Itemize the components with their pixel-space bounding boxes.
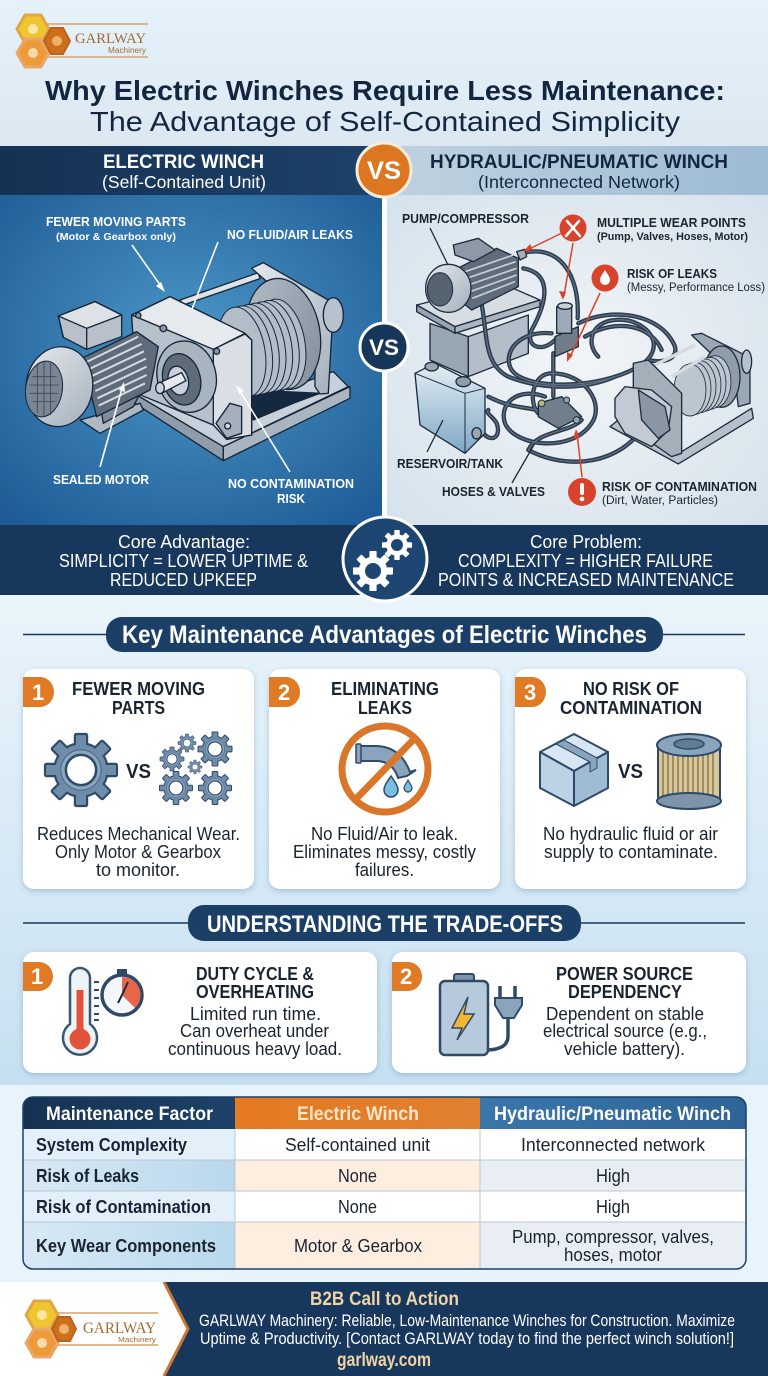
icon: one gear vs many gears: VS bbox=[126, 761, 151, 783]
badge 2: 2 bbox=[400, 964, 412, 989]
comparison header: hydraulic/pneumatic winch bbox=[384, 146, 768, 195]
panel: hydraulic/pneumatic winch bbox=[387, 195, 768, 525]
label: fewer moving parts: FEWER MOVING PARTS bbox=[46, 214, 186, 229]
card text: Dependent on stable bbox=[546, 1004, 704, 1024]
card title: LEAKS bbox=[358, 697, 412, 718]
card text: electrical source (e.g., bbox=[543, 1021, 707, 1041]
label: risk of contamination bbox=[602, 479, 757, 507]
row: key wear components: Key Wear Components bbox=[36, 1236, 216, 1256]
icon: one gear vs many gears bbox=[45, 732, 232, 806]
annotation arrows bbox=[100, 242, 290, 472]
logo: GARLWAY Machinery: Machinery bbox=[108, 46, 146, 55]
card text: Limited run time. bbox=[190, 1004, 321, 1024]
label: risk of leaks bbox=[627, 266, 765, 294]
badge 3 bbox=[515, 677, 546, 707]
icon: plug bbox=[489, 986, 522, 1050]
row: risk of leaks bbox=[36, 1166, 630, 1186]
panel: electric winch bbox=[0, 195, 387, 525]
card text bbox=[543, 824, 718, 862]
heading: understanding the trade-offs: UNDERSTANDING THE TRADE-OFFS bbox=[207, 911, 563, 938]
logo: GARLWAY Machinery: GARLWAY bbox=[75, 31, 146, 47]
core problem: Core Problem: bbox=[530, 532, 642, 552]
card text bbox=[543, 964, 707, 1059]
card 2: eliminating leaks bbox=[269, 669, 500, 889]
footer logo: GARLWAY bbox=[83, 1320, 156, 1337]
table header row: Maintenance Factor bbox=[46, 1104, 214, 1125]
row: system complexity: Interconnected network bbox=[521, 1135, 706, 1155]
label: no contamination risk: RISK bbox=[277, 491, 306, 506]
badge 1 bbox=[23, 962, 53, 991]
card title: NO RISK OF bbox=[583, 678, 679, 699]
call to action text: garlway.com bbox=[337, 1350, 431, 1371]
card text: Eliminates messy, costly bbox=[293, 842, 476, 862]
card 1: fewer moving parts bbox=[23, 669, 254, 889]
core problem bbox=[438, 532, 734, 590]
illustration: electric winch bbox=[21, 263, 350, 461]
card text: DEPENDENCY bbox=[568, 982, 682, 1002]
row: risk of leaks: High bbox=[596, 1166, 630, 1186]
card text: supply to contaminate. bbox=[544, 842, 718, 862]
icon: stopwatch bbox=[102, 969, 142, 1015]
core advantage: SIMPLICITY = LOWER UPTIME & bbox=[59, 551, 308, 571]
leader lines bbox=[427, 228, 535, 483]
row: key wear components bbox=[36, 1227, 714, 1265]
label: risk of leaks: RISK OF LEAKS bbox=[627, 266, 717, 281]
icon: gears bbox=[343, 517, 427, 601]
trade-off card 1: duty cycle and overheating bbox=[23, 952, 377, 1073]
title: Why Electric Winches Require Less Maintenance: bbox=[45, 75, 725, 106]
icon: battery bbox=[440, 974, 488, 1055]
card 3: no risk of contamination bbox=[515, 669, 746, 889]
call to action text bbox=[199, 1289, 735, 1371]
call to action text: B2B Call to Action bbox=[310, 1289, 459, 1310]
label: risk of contamination: (Dirt, Water, Particles) bbox=[602, 495, 718, 507]
label: no fluid/air leaks: NO FLUID/AIR LEAKS bbox=[227, 227, 353, 242]
row: risk of contamination bbox=[36, 1197, 630, 1217]
card title: ELIMINATING bbox=[331, 678, 439, 699]
card text: vehicle battery). bbox=[564, 1039, 685, 1059]
illustration: hydraulic network bbox=[415, 238, 753, 464]
title: The Advantage of Self-Contained Simplicity bbox=[90, 106, 680, 137]
heading: key maintenance advantages: Key Maintenance Advantages of Electric Winches bbox=[122, 621, 647, 649]
row: key wear components: Pump, compressor, valves, bbox=[512, 1227, 714, 1247]
title bbox=[45, 75, 725, 137]
comparison header: electric winch bbox=[0, 146, 384, 195]
table header row bbox=[23, 1097, 746, 1129]
icon: multiple wear points bbox=[560, 214, 586, 242]
icon: risk of contamination bbox=[568, 478, 596, 506]
label: reservoir/tank: RESERVOIR/TANK bbox=[397, 456, 504, 471]
label: multiple wear points: (Pump, Valves, Hoses, Motor) bbox=[597, 231, 748, 243]
card text bbox=[168, 964, 342, 1059]
top VS badge bbox=[357, 143, 411, 197]
card text: No hydraulic fluid or air bbox=[543, 824, 718, 844]
card title: CONTAMINATION bbox=[560, 697, 702, 718]
core strip bbox=[0, 517, 768, 601]
row: key wear components: Motor & Gearbox bbox=[294, 1236, 422, 1256]
card title bbox=[560, 678, 702, 718]
label: pump/compressor: PUMP/COMPRESSOR bbox=[402, 211, 530, 226]
card title bbox=[72, 678, 205, 718]
table header row: Electric Winch bbox=[297, 1104, 419, 1125]
badge 3: 3 bbox=[524, 680, 536, 705]
card text: Reduces Mechanical Wear. bbox=[37, 824, 240, 844]
badge 1 bbox=[23, 677, 54, 707]
card text: POWER SOURCE bbox=[556, 964, 693, 984]
row: risk of contamination: High bbox=[596, 1197, 630, 1217]
label: fewer moving parts bbox=[46, 214, 186, 243]
row: risk of contamination: Risk of Contamination bbox=[36, 1197, 211, 1217]
card text: failures. bbox=[355, 860, 414, 880]
card text: OVERHEATING bbox=[196, 982, 314, 1002]
badge 2 bbox=[269, 677, 300, 707]
core problem: POINTS & INCREASED MAINTENANCE bbox=[438, 570, 734, 590]
table header row: Hydraulic/Pneumatic Winch bbox=[494, 1104, 731, 1125]
heading: understanding the trade-offs bbox=[23, 905, 745, 941]
row: risk of contamination: None bbox=[338, 1197, 377, 1217]
icon: no leaking pipe bbox=[342, 726, 428, 812]
card text: No Fluid/Air to leak. bbox=[311, 824, 458, 844]
label: hoses and valves: HOSES & VALVES bbox=[442, 484, 545, 499]
icon: oil filter bbox=[657, 734, 721, 809]
comparison header: electric winch: (Self-Contained Unit) bbox=[102, 172, 266, 192]
comparison header: electric winch: ELECTRIC WINCH bbox=[103, 152, 264, 173]
footer logo bbox=[26, 1301, 158, 1357]
comparison header: hydraulic/pneumatic winch: (Interconnected Network) bbox=[478, 172, 680, 192]
icon: risk of leaks bbox=[592, 264, 618, 292]
card text: continuous heavy load. bbox=[168, 1039, 342, 1059]
label: no contamination risk bbox=[228, 476, 354, 506]
row: system complexity: System Complexity bbox=[36, 1135, 187, 1155]
label: multiple wear points bbox=[597, 215, 748, 243]
VS label: VS bbox=[618, 761, 643, 783]
card text: Can overheat under bbox=[180, 1021, 329, 1041]
row: risk of leaks: Risk of Leaks bbox=[36, 1166, 139, 1186]
card title: FEWER MOVING bbox=[72, 678, 205, 699]
label: risk of contamination: RISK OF CONTAMINATION bbox=[602, 479, 757, 494]
row shading bbox=[23, 1129, 746, 1269]
footer call to action bbox=[0, 1282, 768, 1376]
label: no contamination risk: NO CONTAMINATION bbox=[228, 476, 354, 491]
row: key wear components: hoses, motor bbox=[564, 1245, 662, 1265]
red arrows bbox=[523, 233, 600, 477]
row: system complexity: Self-contained unit bbox=[285, 1135, 430, 1155]
card text bbox=[37, 824, 240, 880]
heading: key maintenance advantages bbox=[23, 617, 745, 652]
middle VS badge: VS bbox=[369, 335, 399, 360]
label: fewer moving parts: (Motor & Gearbox only) bbox=[56, 231, 176, 243]
badge 2: 2 bbox=[278, 680, 290, 705]
core advantage: Core Advantage: bbox=[118, 532, 250, 552]
core advantage: REDUCED UPKEEP bbox=[110, 570, 257, 590]
card title: PARTS bbox=[112, 697, 165, 718]
badge 2 bbox=[392, 962, 422, 991]
hoses bbox=[480, 251, 675, 462]
row: system complexity bbox=[36, 1135, 706, 1155]
logo: GARLWAY Machinery bbox=[17, 15, 148, 67]
trade-off card 2: power source dependency bbox=[392, 952, 746, 1073]
icon: thermometer bbox=[63, 968, 99, 1055]
middle VS badge bbox=[360, 323, 408, 371]
core advantage bbox=[59, 532, 308, 590]
row: risk of leaks: None bbox=[338, 1166, 377, 1186]
card text: DUTY CYCLE & bbox=[196, 964, 314, 984]
card text: to monitor. bbox=[96, 860, 180, 880]
comparison table bbox=[23, 1097, 746, 1269]
footer logo: Machinery bbox=[118, 1335, 156, 1344]
label: risk of leaks: (Messy, Performance Loss) bbox=[627, 282, 765, 294]
top VS badge: VS bbox=[367, 157, 401, 185]
icon: sealed box bbox=[540, 734, 608, 806]
badge 1: 1 bbox=[32, 680, 44, 705]
label: sealed motor: SEALED MOTOR bbox=[53, 472, 150, 487]
card text bbox=[293, 824, 476, 880]
comparison header: hydraulic/pneumatic winch: HYDRAULIC/PNEUMATIC WINCH bbox=[430, 151, 728, 173]
badge 1: 1 bbox=[31, 964, 43, 989]
label: multiple wear points: MULTIPLE WEAR POINTS bbox=[597, 215, 746, 230]
card title bbox=[331, 678, 439, 718]
card text: Only Motor & Gearbox bbox=[55, 842, 221, 862]
core problem: COMPLEXITY = HIGHER FAILURE bbox=[458, 551, 713, 571]
